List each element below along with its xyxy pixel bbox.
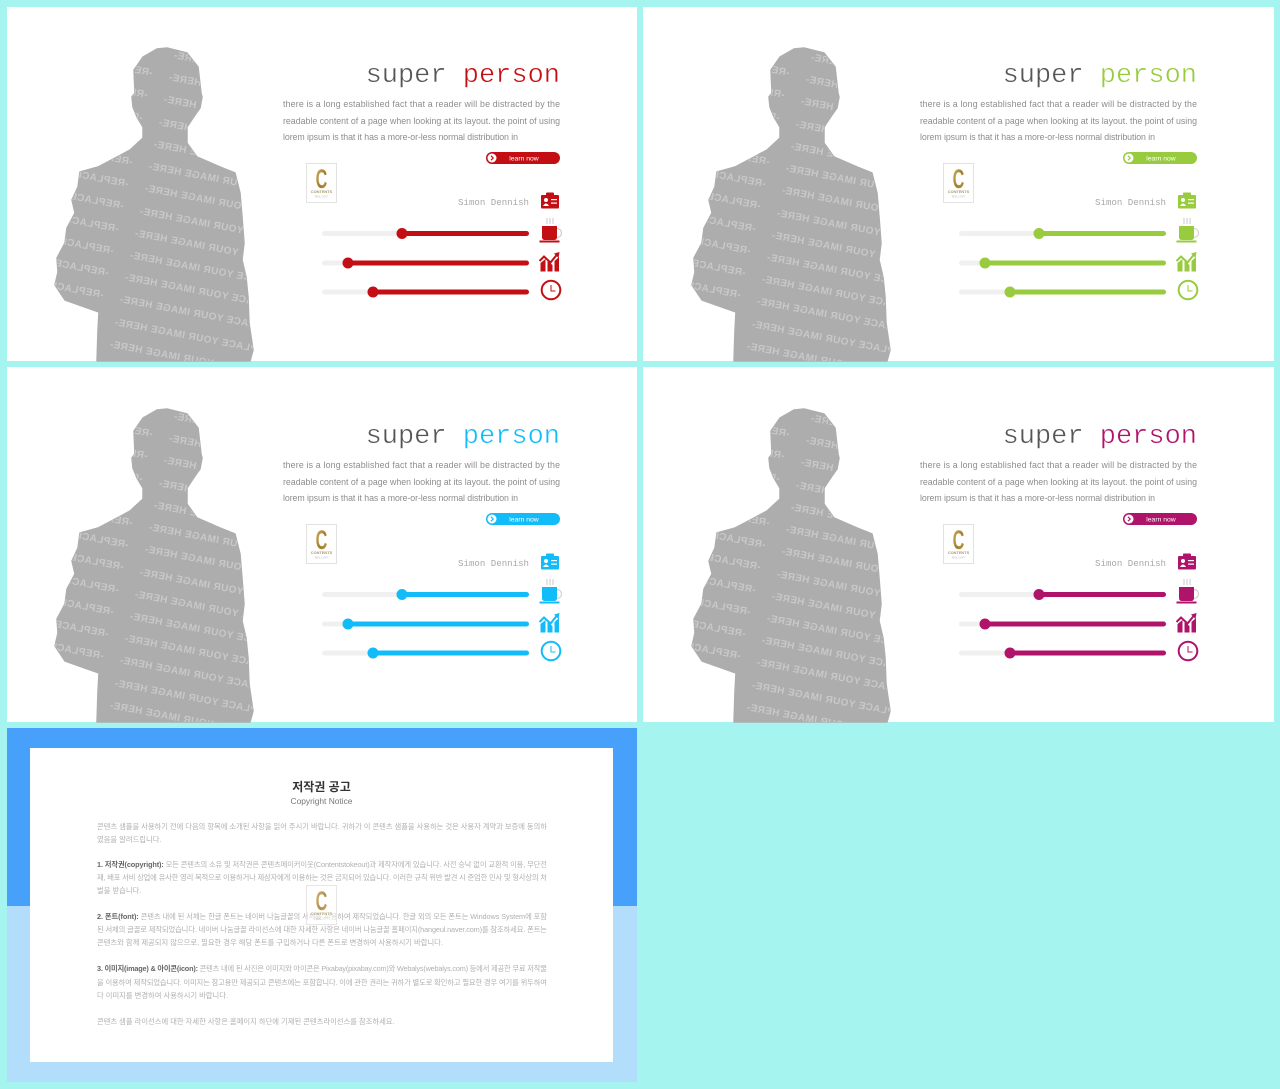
button: learn now: learn now bbox=[509, 156, 539, 162]
logo: C bbox=[316, 164, 327, 194]
button: learn now: learn now bbox=[1146, 156, 1176, 162]
silhouette placeholder: -REPLACE YOUR IMAGE HERE- bbox=[118, 294, 281, 335]
silhouette placeholder: -REPLACE bbox=[69, 191, 124, 212]
silhouette placeholder: -REPLACE bbox=[701, 214, 756, 235]
silhouette placeholder: -REPLACE bbox=[715, 147, 770, 168]
silhouette placeholder: -REPLACE YOUR IMAGE HERE- bbox=[128, 611, 291, 652]
silhouette placeholder: -REPLACE YOUR IMAGE HERE- bbox=[799, 96, 962, 137]
button: learn now bbox=[1123, 152, 1197, 164]
silhouette placeholder: -REPLACE YOUR IMAGE HERE- bbox=[128, 250, 291, 291]
notice section 2: 2. 폰트(font): 콘텐츠 내에 된 서체는 한글 폰트는 네이버 나눔글꼴의 서체를 사용하여 제작되었습니다. 한글 외의 모든 폰트는 Windows System에 포함 bbox=[97, 912, 547, 921]
icon: growth chart bbox=[1176, 252, 1196, 272]
silhouette placeholder: -REPLACE bbox=[696, 597, 751, 618]
heading: super person bbox=[1003, 61, 1197, 91]
silhouette placeholder: -REPLACE bbox=[725, 464, 780, 485]
logo: REAL COPY bbox=[952, 196, 966, 198]
button: learn now: learn now bbox=[1146, 516, 1176, 524]
slider: row 3 bbox=[322, 286, 529, 298]
logo: C bbox=[953, 164, 964, 194]
description text bbox=[283, 99, 560, 142]
description text: readable content of a page when looking at its layout. the point of using bbox=[920, 477, 1197, 487]
notice section 1: 벌을 받습니다. bbox=[97, 886, 141, 895]
silhouette placeholder: -REPLACE YOUR IMAGE HERE- bbox=[172, 50, 335, 91]
panel: super person blue bbox=[7, 367, 637, 741]
panel: super person red bbox=[7, 7, 637, 380]
description text bbox=[283, 460, 560, 503]
logo: C bbox=[316, 525, 327, 555]
slider: row 3 bbox=[959, 648, 1166, 658]
slider: row 2 bbox=[322, 618, 529, 630]
silhouette placeholder: -REPLACE bbox=[49, 280, 104, 301]
logo overlay bbox=[306, 886, 336, 924]
logo overlay: REAL COPY bbox=[315, 918, 329, 920]
silhouette placeholder: -REPLACE bbox=[706, 191, 761, 212]
silhouette placeholder: -REPLACE YOUR IMAGE HERE- bbox=[133, 589, 296, 630]
silhouette placeholder: -REPLACE YOUR IMAGE HERE- bbox=[794, 480, 957, 521]
silhouette placeholder: -REPLACE YOUR IMAGE HERE- bbox=[804, 435, 967, 476]
icon: growth chart bbox=[540, 613, 560, 632]
icon: clock bbox=[542, 642, 560, 660]
silhouette placeholder: -REPLACE YOUR IMAGE HERE- bbox=[765, 613, 928, 654]
silhouette placeholder: -REPLACE YOUR IMAGE HERE- bbox=[765, 252, 928, 293]
slider: row 2 bbox=[959, 258, 1166, 268]
silhouette placeholder: -REPLACE bbox=[78, 508, 133, 529]
notice section 2 bbox=[97, 912, 547, 947]
logo: CONTENTS bbox=[948, 189, 970, 194]
silhouette placeholder: -REPLACE YOUR IMAGE HERE- bbox=[123, 272, 286, 313]
icon: clock bbox=[1179, 281, 1197, 299]
silhouette placeholder: -REPLACE YOUR IMAGE HERE- bbox=[172, 411, 335, 452]
button: learn now bbox=[486, 152, 560, 164]
description text bbox=[920, 99, 1197, 142]
notice subtitle: Copyright Notice bbox=[291, 796, 353, 806]
notice title: 저작권 공고 bbox=[292, 779, 351, 794]
silhouette placeholder: -REPLACE YOUR IMAGE HERE- bbox=[789, 502, 952, 543]
silhouette placeholder bbox=[691, 408, 891, 723]
description text: readable content of a page when looking at its layout. the point of using bbox=[920, 116, 1197, 126]
description text: lorem ipsum is that it has a more-or-less normal distribution in bbox=[920, 132, 1155, 142]
silhouette placeholder: -REPLACE bbox=[98, 58, 153, 79]
silhouette placeholder: -REPLACE bbox=[720, 486, 775, 507]
silhouette placeholder: -REPLACE YOUR IMAGE HERE- bbox=[799, 457, 962, 498]
silhouette placeholder: -REPLACE YOUR IMAGE HERE- bbox=[162, 455, 325, 496]
notice intro: 콘텐츠 샘플을 사용하기 전에 다음의 항목에 소개된 사항을 읽어 주시기 바랍니다. 귀하가 이 콘텐츠 샘플을 사용하는 것은 사용자 계약과 보증에 동의하 bbox=[97, 822, 547, 831]
silhouette placeholder: -REPLACE YOUR IMAGE HERE- bbox=[750, 319, 913, 360]
icon: coffee cup bbox=[1176, 218, 1198, 242]
icon: id badge bbox=[1178, 554, 1196, 570]
silhouette placeholder: -REPLACE YOUR IMAGE HERE- bbox=[780, 546, 943, 587]
silhouette placeholder: -REPLACE YOUR IMAGE HERE- bbox=[138, 567, 301, 608]
icon: coffee cup bbox=[540, 218, 562, 242]
slider: row 1 bbox=[959, 589, 1166, 600]
silhouette placeholder: -REPLACE bbox=[64, 214, 119, 235]
silhouette placeholder: -REPLACE bbox=[98, 419, 153, 440]
silhouette placeholder: -REPLACE bbox=[74, 530, 129, 551]
description text: readable content of a page when looking at its layout. the point of using bbox=[283, 477, 560, 487]
notice section 2: 콘텐츠와 함께 제공되지 않으므로, 필요한 경우 해당 폰트를 구입하거나 다른 폰트로 변경하여 사용하시기 바랍니다. bbox=[97, 938, 443, 947]
silhouette placeholder bbox=[54, 47, 254, 362]
silhouette placeholder: -REPLACE YOUR IMAGE HERE- bbox=[745, 702, 908, 743]
icon: clock bbox=[542, 281, 560, 299]
silhouette placeholder: -REPLACE YOUR IMAGE HERE- bbox=[138, 206, 301, 247]
button: learn now bbox=[1123, 513, 1197, 525]
logo overlay: C bbox=[316, 886, 327, 916]
heading: super person bbox=[366, 61, 560, 91]
panel: copyright notice bbox=[7, 728, 637, 1082]
silhouette placeholder: -REPLACE YOUR IMAGE HERE- bbox=[108, 339, 271, 380]
silhouette placeholder: -REPLACE YOUR IMAGE HERE- bbox=[755, 657, 918, 698]
notice section 1: 재, 배포 서비 상업에 유사한 영리 목적으로 이용하거나 제삼자에게 이용하는 것은 금지되어 있습니다. 이러한 규칙 위반 발견 시 준엄한 민사 및 형사상의 처 bbox=[97, 873, 547, 882]
silhouette placeholder: -REPLACE bbox=[686, 641, 741, 662]
silhouette placeholder: -REPLACE YOUR IMAGE HERE- bbox=[789, 141, 952, 182]
panel: super person magenta bbox=[643, 367, 1274, 743]
notice section 3: 다 이미지를 변경하여 사용하시기 바랍니다. bbox=[97, 991, 228, 1000]
heading: super person bbox=[366, 422, 560, 452]
silhouette placeholder: -REPLACE YOUR IMAGE HERE- bbox=[760, 635, 923, 676]
icon: coffee cup bbox=[540, 579, 562, 604]
logo bbox=[306, 164, 336, 202]
icon: id badge bbox=[1178, 192, 1196, 208]
silhouette placeholder: -REPLACE YOUR IMAGE HERE- bbox=[775, 208, 938, 249]
logo: REAL COPY bbox=[315, 556, 329, 560]
notice section 2: 된 서체의 글꼴로 제작되었습니다. 네이버 나눔글꼴 라이선스에 대한 자세한 사항은 네이버 나눔글꼴 홈페이지(hangeul.naver.com)를 참조하세요. 폰트는 bbox=[97, 925, 547, 934]
silhouette placeholder: -REPLACE YOUR IMAGE HERE- bbox=[152, 500, 315, 541]
description text: lorem ipsum is that it has a more-or-less normal distribution in bbox=[283, 132, 518, 142]
silhouette placeholder: -REPLACE bbox=[735, 419, 790, 440]
silhouette placeholder: -REPLACE bbox=[715, 508, 770, 529]
silhouette placeholder: -REPLACE bbox=[691, 619, 746, 640]
notice intro bbox=[97, 822, 547, 844]
description text: lorem ipsum is that it has a more-or-less normal distribution in bbox=[283, 493, 518, 503]
name: Simon Dennish bbox=[458, 558, 529, 569]
logo: CONTENTS bbox=[948, 550, 970, 555]
silhouette placeholder: -REPLACE YOUR IMAGE HERE- bbox=[147, 161, 310, 202]
silhouette placeholder: -REPLACE bbox=[711, 169, 766, 190]
silhouette placeholder: -REPLACE YOUR IMAGE HERE- bbox=[167, 433, 330, 474]
notice intro: 였음을 알려드립니다. bbox=[97, 835, 161, 844]
silhouette placeholder: -REPLACE YOUR IMAGE HERE- bbox=[770, 591, 933, 632]
description text: lorem ipsum is that it has a more-or-less normal distribution in bbox=[920, 493, 1155, 503]
silhouette placeholder: -REPLACE bbox=[93, 441, 148, 462]
silhouette placeholder: -REPLACE YOUR IMAGE HERE- bbox=[804, 74, 967, 115]
description text: there is a long established fact that a reader will be distracted by the bbox=[283, 460, 560, 470]
silhouette placeholder: -REPLACE YOUR IMAGE HERE- bbox=[118, 655, 281, 696]
icon: growth chart bbox=[540, 252, 560, 272]
notice section 3: 을 이용하여 제작되었습니다. 이미지는 참고용만 제공되고 콘텐츠에는 포함합니다. 이에 관한 권리는 귀하가 별도로 확인하고 필요한 경우 여기를 위두하여 bbox=[97, 978, 547, 987]
silhouette placeholder: -REPLACE bbox=[54, 619, 109, 640]
notice footer line: 콘텐츠 샘플 라이선스에 대한 자세한 사항은 홈페이지 하단에 기재된 콘텐츠라이선스를 참조하세요. bbox=[97, 1017, 395, 1026]
description text: there is a long established fact that a reader will be distracted by the bbox=[920, 460, 1197, 470]
icon: id badge bbox=[541, 554, 559, 570]
icon: coffee cup bbox=[1176, 579, 1198, 604]
silhouette placeholder: -REPLACE YOUR IMAGE HERE- bbox=[167, 72, 330, 113]
name: Simon Dennish bbox=[1095, 197, 1166, 208]
silhouette placeholder: -REPLACE bbox=[54, 258, 109, 279]
silhouette placeholder: -REPLACE bbox=[88, 103, 143, 124]
silhouette placeholder: -REPLACE YOUR IMAGE HERE- bbox=[123, 633, 286, 674]
notice section 1 bbox=[97, 860, 547, 895]
slider: row 2 bbox=[322, 258, 529, 268]
logo overlay: CONTENTS bbox=[311, 911, 333, 916]
notice section 3: 3. 이미지(image) & 아이콘(icon): 콘텐츠 내에 된 사진은 이미지와 아이콘은 Pixabay(pixabay.com)와 Webalys(webalys.com) 등에서 제공한 무료 저작물 bbox=[97, 964, 547, 973]
silhouette placeholder: -REPLACE bbox=[59, 597, 114, 618]
silhouette placeholder: -REPLACE bbox=[49, 641, 104, 662]
silhouette placeholder: -REPLACE YOUR IMAGE HERE- bbox=[143, 183, 306, 224]
logo: CONTENTS bbox=[311, 189, 333, 194]
description text: readable content of a page when looking at its layout. the point of using bbox=[283, 116, 560, 126]
silhouette placeholder: -REPLACE YOUR IMAGE HERE- bbox=[143, 544, 306, 585]
logo: C bbox=[953, 525, 964, 555]
logo bbox=[944, 524, 974, 564]
silhouette placeholder: -REPLACE bbox=[735, 58, 790, 79]
icon: id badge bbox=[541, 192, 559, 208]
silhouette placeholder: -REPLACE YOUR IMAGE HERE- bbox=[147, 522, 310, 563]
panel: super person green bbox=[643, 7, 1274, 382]
logo bbox=[944, 164, 974, 202]
logo: CONTENTS bbox=[311, 550, 333, 555]
button: learn now: learn now bbox=[509, 516, 539, 524]
icon: clock bbox=[1179, 642, 1197, 660]
silhouette placeholder: -REPLACE YOUR IMAGE HERE- bbox=[157, 478, 320, 519]
slider: row 2 bbox=[959, 618, 1166, 630]
silhouette placeholder: -REPLACE bbox=[83, 486, 138, 507]
silhouette placeholder: -REPLACE bbox=[701, 575, 756, 596]
silhouette placeholder: -REPLACE YOUR IMAGE HERE- bbox=[162, 94, 325, 135]
silhouette placeholder: -REPLACE YOUR IMAGE HERE- bbox=[745, 341, 908, 382]
silhouette placeholder: -REPLACE YOUR IMAGE HERE- bbox=[775, 569, 938, 610]
silhouette placeholder: -REPLACE YOUR IMAGE HERE- bbox=[780, 185, 943, 226]
silhouette placeholder: -REPLACE bbox=[78, 147, 133, 168]
silhouette placeholder: -REPLACE bbox=[83, 125, 138, 146]
logo bbox=[306, 524, 336, 564]
silhouette placeholder bbox=[54, 408, 254, 723]
icon: growth chart bbox=[1176, 613, 1196, 632]
silhouette placeholder: -REPLACE bbox=[686, 280, 741, 301]
silhouette placeholder: -REPLACE bbox=[69, 552, 124, 573]
description text: there is a long established fact that a reader will be distracted by the bbox=[920, 99, 1197, 109]
silhouette placeholder: -REPLACE YOUR IMAGE HERE- bbox=[108, 700, 271, 741]
silhouette placeholder: -REPLACE bbox=[725, 103, 780, 124]
silhouette placeholder: -REPLACE bbox=[88, 464, 143, 485]
silhouette placeholder: -REPLACE YOUR IMAGE HERE- bbox=[809, 413, 972, 454]
silhouette placeholder: -REPLACE bbox=[64, 575, 119, 596]
silhouette placeholder: -REPLACE bbox=[691, 258, 746, 279]
silhouette placeholder: -REPLACE YOUR IMAGE HERE- bbox=[794, 119, 957, 160]
slider: row 1 bbox=[322, 228, 529, 239]
slider: row 1 bbox=[322, 589, 529, 600]
silhouette placeholder: -REPLACE bbox=[730, 80, 785, 101]
silhouette placeholder: -REPLACE YOUR IMAGE HERE- bbox=[157, 117, 320, 158]
silhouette placeholder: -REPLACE YOUR IMAGE HERE- bbox=[755, 296, 918, 337]
slider: row 1 bbox=[959, 228, 1166, 239]
silhouette placeholder: -REPLACE YOUR IMAGE HERE- bbox=[784, 163, 947, 204]
slider: row 3 bbox=[322, 648, 529, 658]
notice section 3 bbox=[97, 964, 547, 1000]
silhouette placeholder: -REPLACE YOUR IMAGE HERE- bbox=[760, 274, 923, 315]
logo: REAL COPY bbox=[952, 556, 966, 560]
silhouette placeholder: -REPLACE bbox=[696, 236, 751, 257]
silhouette placeholder: -REPLACE YOUR IMAGE HERE- bbox=[152, 139, 315, 180]
silhouette placeholder: -REPLACE YOUR IMAGE HERE- bbox=[784, 524, 947, 565]
silhouette placeholder: -REPLACE bbox=[711, 530, 766, 551]
silhouette placeholder: -REPLACE YOUR IMAGE HERE- bbox=[750, 680, 913, 721]
silhouette placeholder: -REPLACE YOUR IMAGE HERE- bbox=[133, 228, 296, 269]
silhouette placeholder: -REPLACE YOUR IMAGE HERE- bbox=[113, 678, 276, 719]
silhouette placeholder bbox=[691, 47, 891, 362]
notice section 1: 1. 저작권(copyright): 모든 콘텐츠의 소유 및 저작권은 콘텐츠메이커이웃(Contentstokeout)과 제작자에게 있습니다. 사전 승낙 없이 교환적 이용, 무단전 bbox=[97, 860, 547, 869]
description text bbox=[920, 460, 1197, 503]
name: Simon Dennish bbox=[1095, 558, 1166, 569]
heading: super person bbox=[1003, 422, 1197, 452]
slider: row 3 bbox=[959, 286, 1166, 298]
button: learn now bbox=[486, 513, 560, 525]
silhouette placeholder: -REPLACE bbox=[706, 552, 761, 573]
silhouette placeholder: -REPLACE YOUR IMAGE HERE- bbox=[770, 230, 933, 271]
silhouette placeholder: -REPLACE bbox=[93, 80, 148, 101]
silhouette placeholder: -REPLACE YOUR IMAGE HERE- bbox=[113, 317, 276, 358]
silhouette placeholder: -REPLACE bbox=[730, 441, 785, 462]
silhouette placeholder: -REPLACE bbox=[720, 125, 775, 146]
logo: REAL COPY bbox=[315, 196, 329, 198]
description text: there is a long established fact that a reader will be distracted by the bbox=[283, 99, 560, 109]
silhouette placeholder: -REPLACE bbox=[59, 236, 114, 257]
name: Simon Dennish bbox=[458, 197, 529, 208]
silhouette placeholder: -REPLACE bbox=[74, 169, 129, 190]
silhouette placeholder: -REPLACE YOUR IMAGE HERE- bbox=[809, 52, 972, 93]
